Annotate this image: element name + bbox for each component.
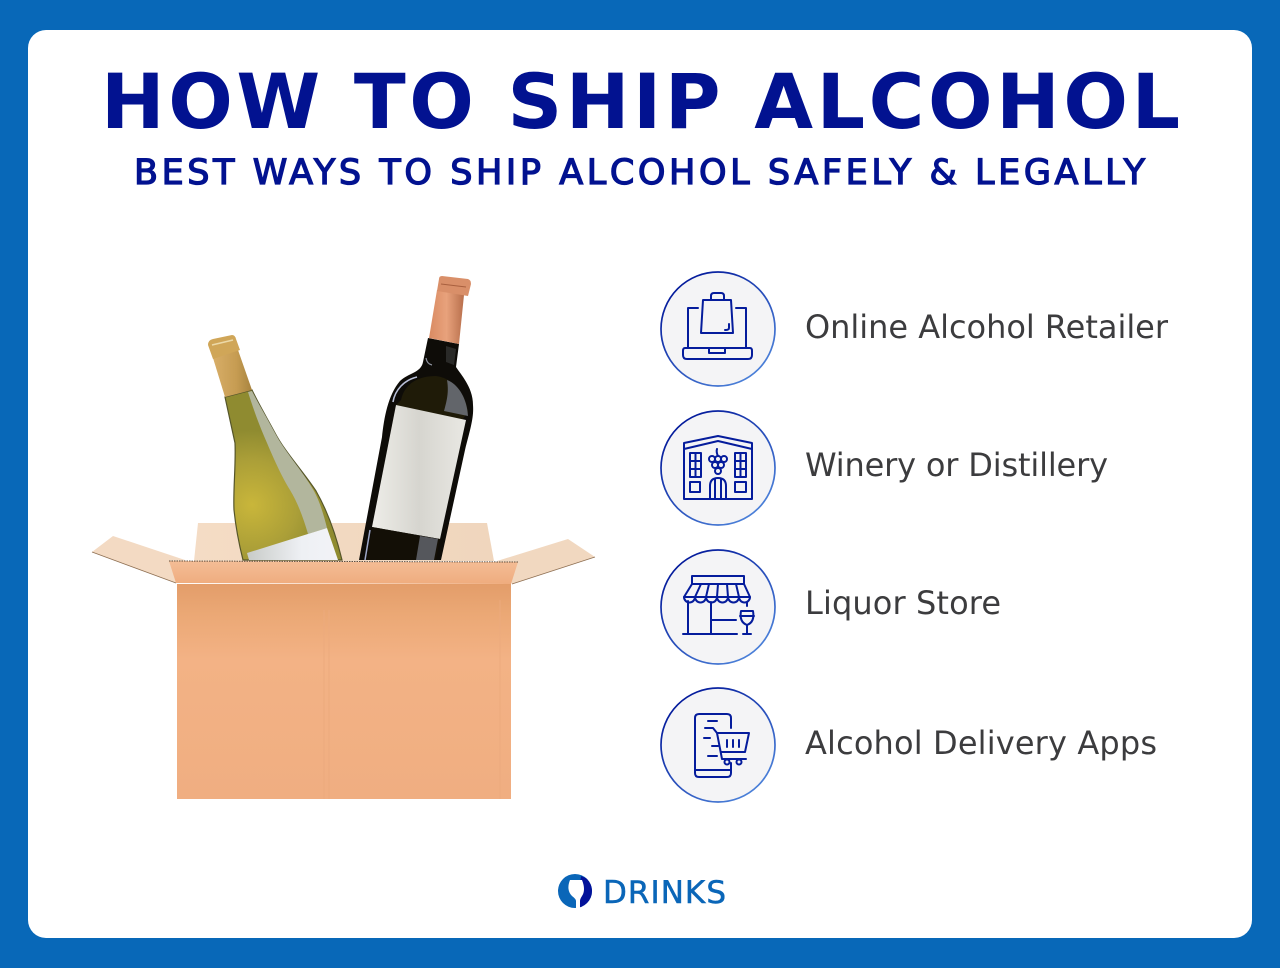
label: Alcohol Delivery Apps xyxy=(805,724,1157,762)
label: Online Alcohol Retailer xyxy=(805,308,1169,346)
list item: online alcohol retailer xyxy=(661,272,1169,386)
icon: winery building xyxy=(661,411,775,525)
box right flap xyxy=(497,539,595,584)
icon: phone with shopping cart xyxy=(661,688,775,802)
wordmark: DRINKS xyxy=(603,875,726,911)
box front creases xyxy=(324,600,500,799)
subtitle: BEST WAYS TO SHIP ALCOHOL SAFELY & LEGALLY xyxy=(134,153,1146,193)
white wine bottle xyxy=(208,335,342,560)
box left flap xyxy=(92,536,185,583)
box front panel xyxy=(177,584,511,799)
icon: laptop with shopping bag xyxy=(661,272,775,386)
box flap edge xyxy=(169,561,518,562)
flap shadow edges xyxy=(92,552,595,584)
logo: drinks xyxy=(558,874,725,908)
box front flap xyxy=(169,561,518,584)
label: Winery or Distillery xyxy=(805,446,1108,484)
list item: winery or distillery xyxy=(661,411,1108,525)
list item: alcohol delivery apps xyxy=(661,688,1157,802)
red wine bottle xyxy=(359,276,473,560)
label: Liquor Store xyxy=(805,584,1001,622)
icon: wine glass logo mark xyxy=(558,874,592,908)
box back flap xyxy=(194,523,494,561)
title: HOW TO SHIP ALCOHOL xyxy=(101,57,1180,146)
illustration: open box with wine bottles xyxy=(92,276,595,799)
icon: storefront with wine glass xyxy=(661,550,775,664)
list item: liquor store xyxy=(661,550,1001,664)
